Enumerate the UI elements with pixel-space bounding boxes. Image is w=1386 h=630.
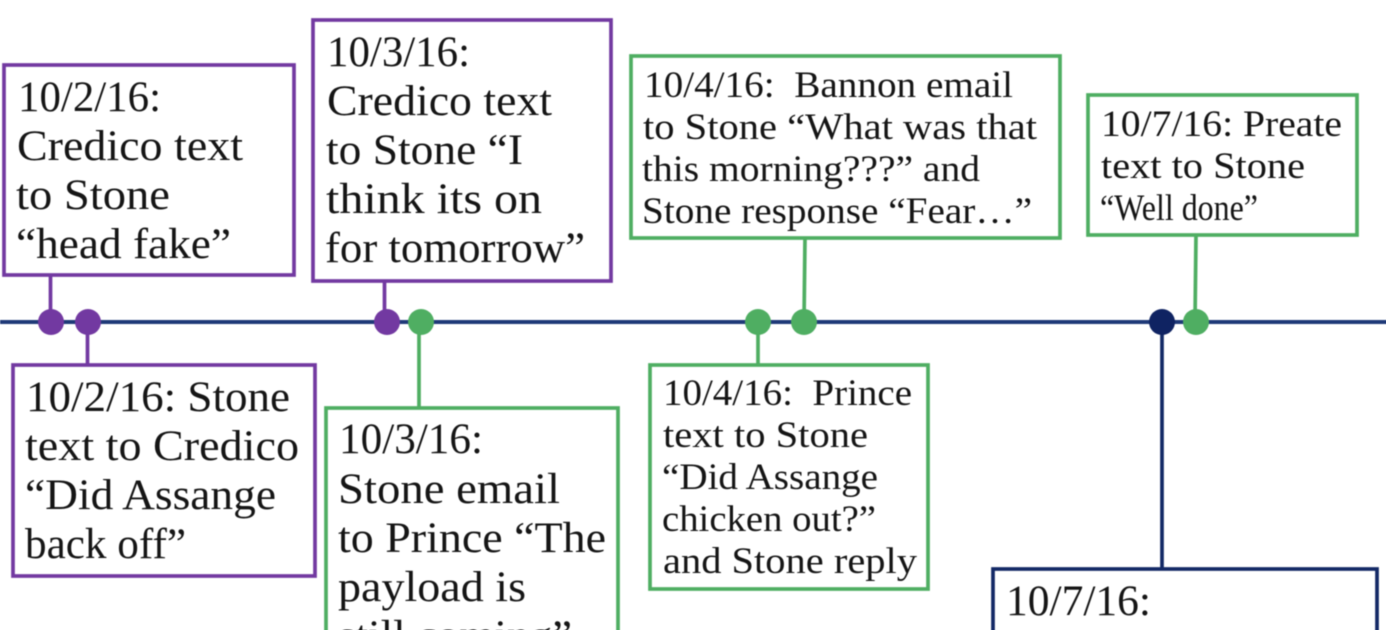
callout text: “Did Assange [25, 472, 276, 519]
callout text: to Stone “I [326, 127, 523, 174]
callout text: 10/4/16: Prince [663, 372, 912, 413]
callout box [4, 65, 294, 275]
connector [1195, 235, 1196, 322]
callout box [650, 365, 928, 589]
connector [417, 322, 421, 408]
marker dot [75, 309, 101, 335]
callout text: 10/7/16: [1006, 578, 1151, 625]
callout box [13, 365, 315, 576]
callout text: text to Credico [25, 423, 299, 470]
callout text: for tomorrow” [325, 225, 585, 272]
marker dot [791, 309, 817, 335]
callout text [338, 416, 606, 630]
connector [1160, 322, 1164, 569]
callout text: text to Stone [1101, 145, 1305, 186]
callout text: back off” [25, 521, 186, 568]
callout text [325, 29, 585, 272]
callout text: payload is [338, 564, 526, 611]
callout text: text to Stone [663, 414, 868, 455]
event: 10/4/16 Bannon email to Stone [631, 56, 1060, 335]
callout text: Credico text [17, 123, 243, 170]
callout text: to Stone [16, 172, 170, 219]
connector [804, 238, 805, 322]
callout text: Stone response “Fear…” [642, 190, 1032, 231]
connector [86, 322, 89, 365]
callout text: and Stone reply [663, 540, 918, 581]
connector [756, 322, 760, 365]
callout text [642, 64, 1037, 231]
callout text [662, 372, 918, 581]
marker dot [1149, 309, 1175, 335]
callout box [993, 569, 1377, 630]
event: 10/4/16 Prince text to Stone [650, 309, 928, 589]
event: 10/7/16 Preate text to Stone [1088, 95, 1357, 335]
callout text: to Prince “The [338, 515, 606, 562]
callout text: 10/7/16: Preate [1101, 103, 1342, 144]
connector [383, 281, 386, 322]
marker dot [1183, 309, 1209, 335]
callout text: 10/3/16: [327, 29, 470, 76]
callout text: think its on [326, 176, 542, 223]
callout text: chicken out?” [662, 498, 876, 539]
marker dot [38, 309, 64, 335]
callout text [1100, 103, 1342, 228]
callout text: Credico text [327, 78, 552, 125]
callout text: to Stone “What was that [643, 106, 1037, 147]
timeline axis [0, 320, 1386, 324]
callout text: 10/2/16: Stone [26, 374, 290, 421]
marker dot [374, 309, 400, 335]
marker dot [408, 309, 434, 335]
marker dot [745, 309, 771, 335]
callout text: “Did Assange [662, 456, 878, 497]
callout text: 10/3/16: [339, 416, 483, 463]
callout box [326, 408, 618, 630]
event: 10/3/16 Credico text to Stone [313, 20, 611, 335]
callout text: “head fake” [16, 221, 231, 268]
callout text: 10/4/16: Bannon email [644, 64, 1013, 105]
event: 10/7/16 navy entry [993, 309, 1377, 630]
callout text [16, 74, 243, 268]
connector [49, 275, 52, 322]
event: 10/2/16 Credico text to Stone [4, 65, 294, 335]
callout text [25, 374, 299, 568]
callout box [313, 20, 611, 281]
callout text: “Well done” [1100, 187, 1258, 228]
event: 10/2/16 Stone text to Credico [13, 309, 315, 576]
callout text: this morning???” and [642, 148, 980, 189]
event: 10/3/16 Stone email to Prince [326, 309, 618, 630]
callout text: Stone email [338, 466, 560, 513]
callout box [1088, 95, 1357, 235]
callout text: 10/2/16: [18, 74, 161, 121]
callout box [631, 56, 1060, 238]
